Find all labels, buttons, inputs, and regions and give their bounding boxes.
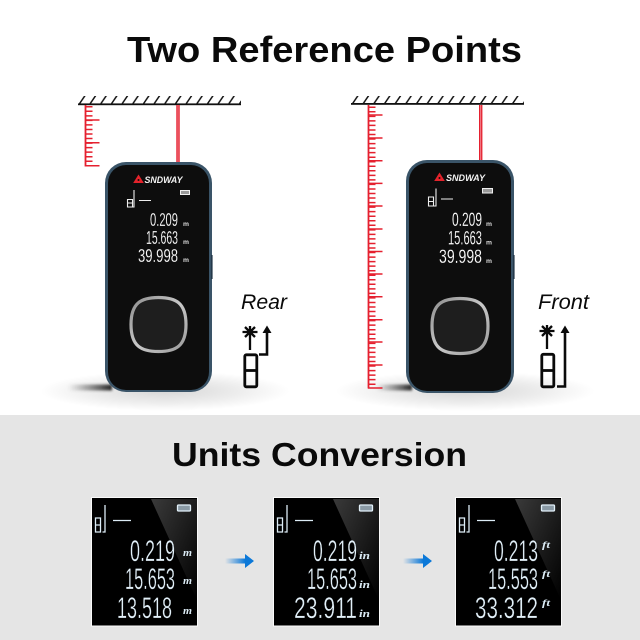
readings: m [486, 222, 492, 228]
mode icon [428, 188, 453, 206]
readings: in [359, 608, 370, 620]
readings: 13.518 [117, 592, 172, 625]
readings: m [486, 240, 492, 246]
readings: m [183, 547, 192, 559]
readings: m [183, 222, 189, 228]
readings: 15.553 [488, 563, 538, 596]
device: front [406, 160, 515, 393]
icon: front reference [540, 325, 570, 387]
mode icon [128, 190, 151, 207]
readings [439, 209, 492, 268]
readings: in [359, 579, 370, 591]
readings: 15.663 [448, 228, 482, 250]
readings [294, 535, 370, 625]
logo: SNDWAY [144, 175, 184, 186]
button [131, 298, 186, 352]
readings: m [183, 258, 189, 264]
readings: 15.653 [125, 563, 175, 596]
label: Rear: Rear [241, 291, 288, 314]
ruler: front [368, 105, 382, 388]
readings: 0.219 [313, 535, 357, 568]
title: Two Reference Points: Two Reference Points [127, 29, 522, 70]
LCD screen: metres [92, 498, 198, 626]
battery and mode icons [460, 505, 554, 532]
panel: rear reference [40, 96, 290, 411]
readings: 23.911 [294, 592, 357, 625]
panel: units conversion [0, 415, 640, 640]
laser beam: front [479, 105, 482, 161]
readings: 33.312 [475, 592, 538, 625]
arrow: metres to inches [225, 554, 254, 568]
laser beam: rear [176, 105, 180, 163]
readings: 0.213 [494, 535, 538, 568]
floor shadow: front [335, 371, 595, 411]
readings: ft [542, 598, 551, 608]
readings: 39.998 [138, 245, 178, 266]
readings: 39.998 [439, 246, 482, 268]
readings [475, 535, 551, 625]
grey background [0, 415, 640, 640]
readings: in [359, 550, 370, 562]
readings: 0.219 [130, 535, 175, 568]
panel: front reference [335, 96, 595, 411]
readings: m [183, 605, 192, 617]
floor shadow: rear [40, 371, 290, 411]
readings: 15.653 [307, 563, 357, 596]
logo: SNDWAY [446, 173, 487, 184]
button [432, 298, 488, 354]
arrow: inches to feet [403, 554, 432, 568]
readings: m [183, 240, 189, 246]
icon: rear reference [242, 326, 272, 387]
readings: m [486, 259, 492, 265]
ceiling line with hatching: front [351, 96, 524, 105]
readings: ft [542, 569, 551, 579]
LCD screen: inches [274, 498, 380, 626]
readings: 0.209 [150, 209, 178, 230]
LCD screen: feet [456, 498, 562, 626]
readings: 0.209 [452, 209, 482, 231]
battery icon [180, 190, 190, 194]
battery icon [482, 188, 492, 193]
heading: Units Conversion: Units Conversion [172, 436, 467, 473]
ceiling line with hatching: rear [78, 96, 241, 105]
readings: 15.663 [146, 227, 178, 248]
label: Front: Front [538, 291, 590, 314]
ruler: rear [85, 105, 100, 166]
readings: m [183, 575, 192, 587]
readings: ft [542, 540, 551, 550]
readings [138, 209, 189, 266]
battery and mode icons [278, 505, 372, 532]
device: rear [105, 162, 213, 392]
battery and mode icons [96, 505, 190, 532]
readings [117, 535, 192, 625]
